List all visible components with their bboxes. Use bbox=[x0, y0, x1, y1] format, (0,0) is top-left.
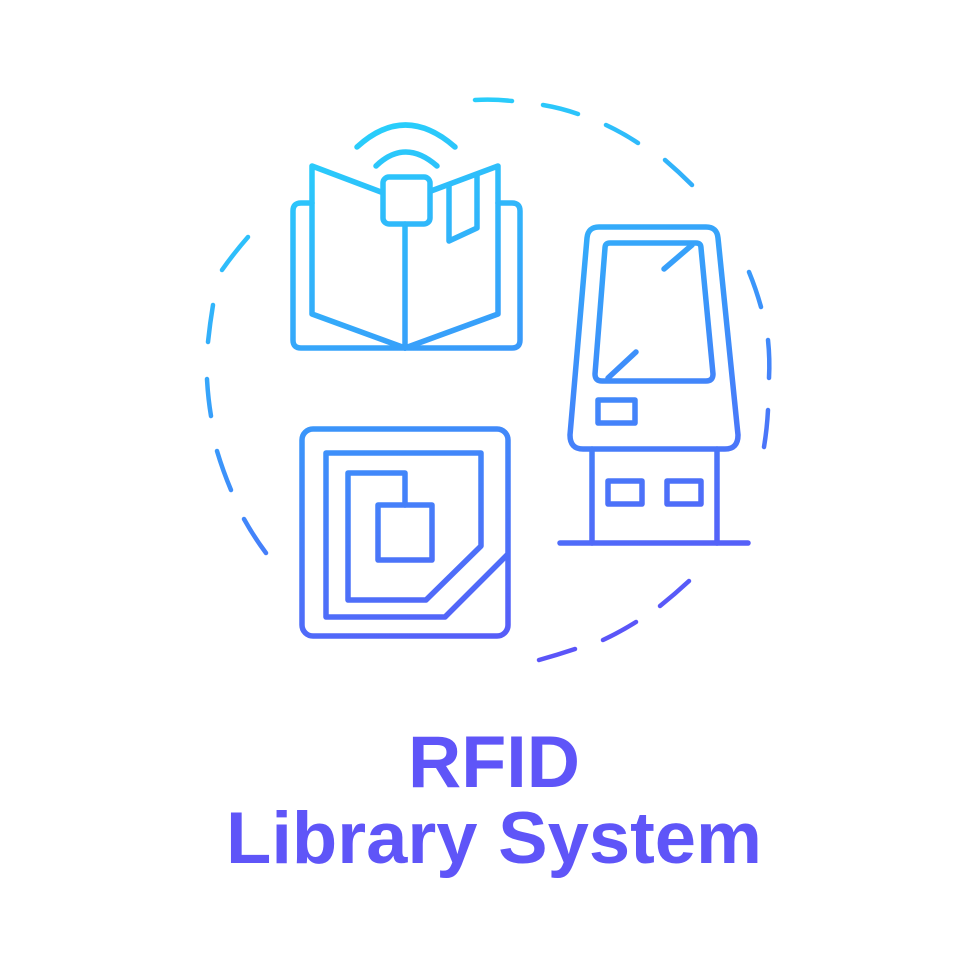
antenna spiral bbox=[326, 453, 507, 617]
icon: self-service kiosk bbox=[560, 227, 748, 543]
title: Library System bbox=[226, 798, 762, 879]
signal waves bbox=[376, 152, 437, 166]
tag outline bbox=[302, 429, 508, 636]
bookmark bbox=[449, 175, 477, 241]
spine bbox=[402, 224, 408, 348]
icon: open book with RFID tag bbox=[293, 125, 520, 348]
book cover bbox=[293, 203, 520, 348]
base slots bbox=[608, 481, 642, 504]
kiosk body bbox=[570, 227, 738, 449]
title: RFID bbox=[408, 722, 580, 803]
title bbox=[226, 722, 762, 879]
dashed circle ring bbox=[207, 100, 769, 660]
chip bbox=[378, 505, 432, 560]
RFID square on book bbox=[383, 177, 430, 224]
screen bbox=[595, 243, 713, 381]
card slot bbox=[598, 400, 635, 423]
base bbox=[589, 449, 595, 543]
ground line bbox=[560, 540, 748, 546]
left page bbox=[312, 166, 405, 348]
icon: RFID tag antenna chip bbox=[302, 429, 508, 636]
right page bbox=[405, 166, 498, 348]
screen glare bbox=[664, 245, 692, 269]
